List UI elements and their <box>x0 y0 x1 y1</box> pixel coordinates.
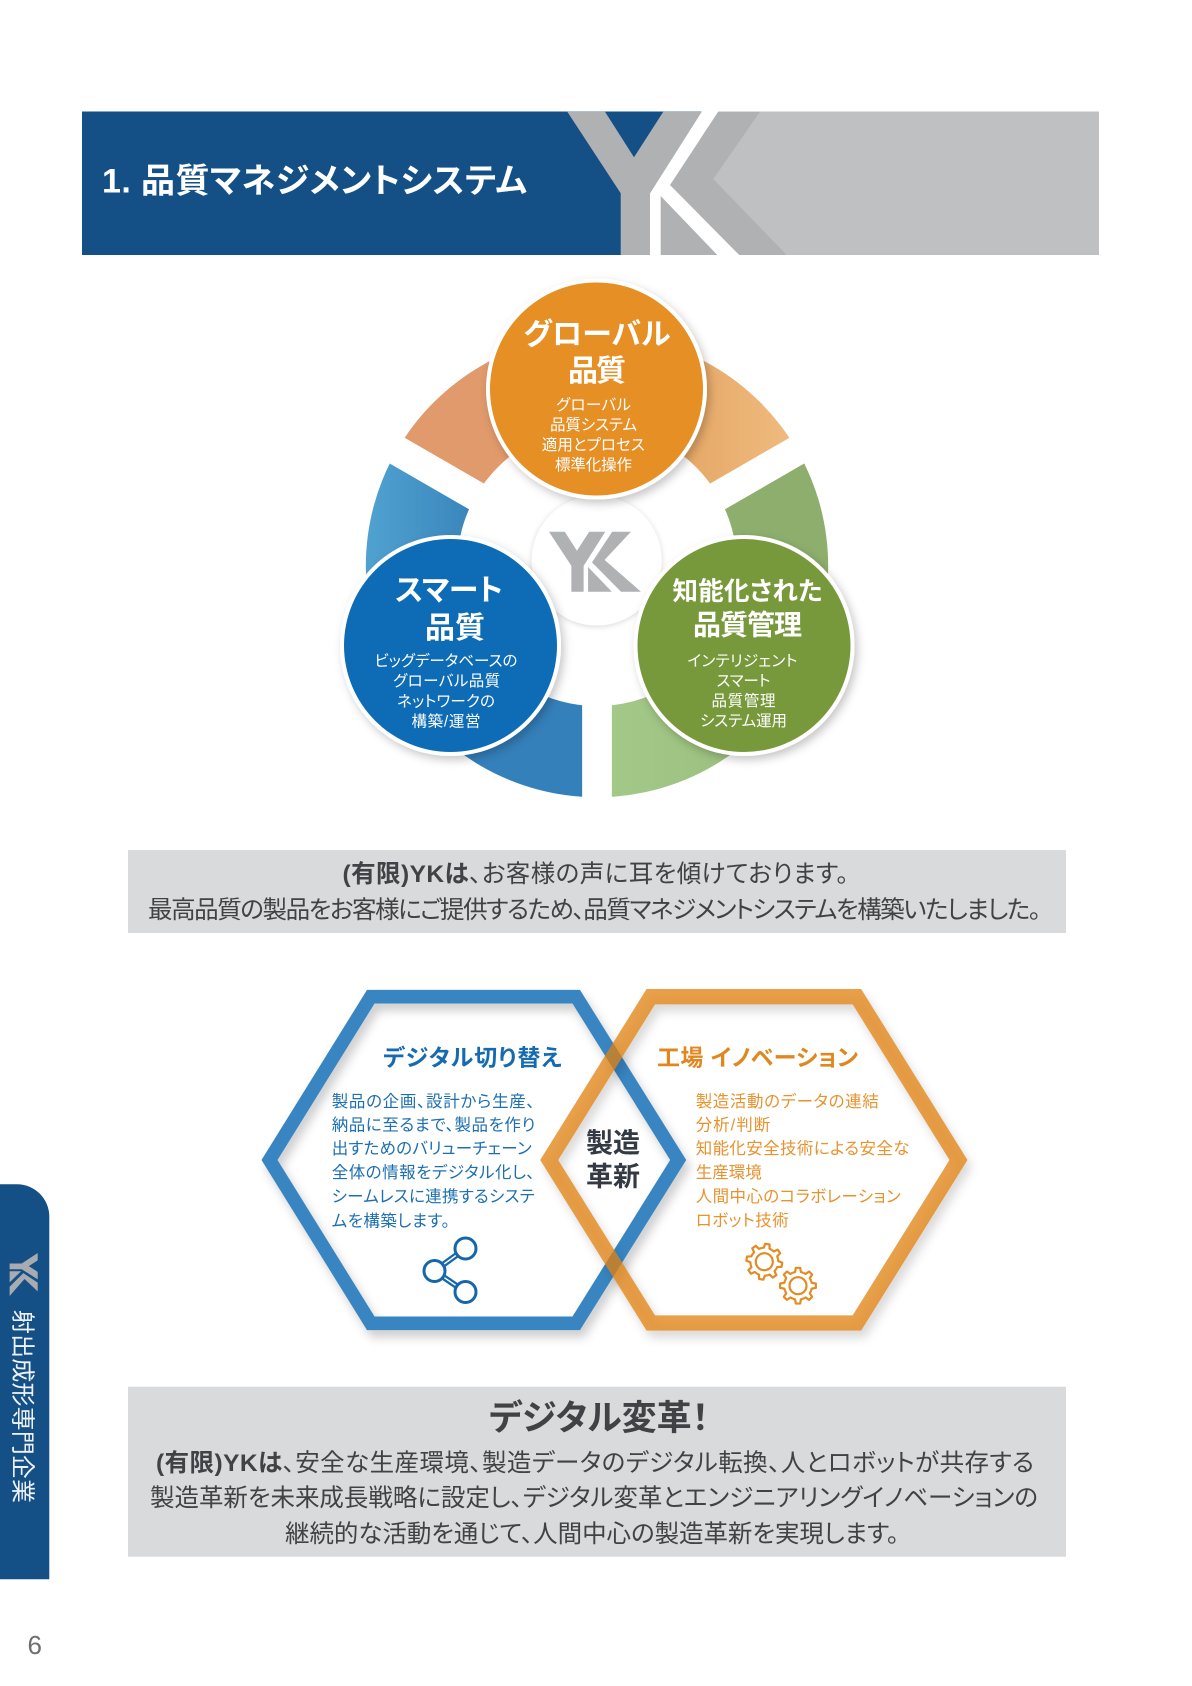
digital body text: 製品の企画、設計から生産、 <box>332 1092 535 1111</box>
icon: share network <box>424 1238 476 1302</box>
circle: global quality <box>486 278 707 500</box>
digital transformation panel <box>128 1387 1066 1557</box>
circle: smart quality: ネットワークの <box>397 692 495 710</box>
factory body text: 製造活動のデータの連結 <box>696 1091 879 1111</box>
circle: intelligent quality control: スマート <box>716 673 770 690</box>
quality cycle diagram <box>340 278 854 830</box>
banner logo gap <box>650 112 739 255</box>
banner YK logo <box>567 112 787 255</box>
factory heading: 工場 イノベーション <box>657 1045 858 1071</box>
circle: global quality: グローバル <box>524 318 671 351</box>
panel line 2: 製造革新を未来成長戦略に設定し、デジタル変革とエンジニアリングイノベーションの <box>150 1484 1038 1512</box>
digital body text: 全体の情報をデジタル化し、 <box>332 1162 535 1182</box>
factory body text: ロボット技術 <box>696 1211 789 1230</box>
circle: intelligent quality control: 品質管理 <box>712 692 776 710</box>
factory body text: 人間中心のコラボレーション <box>696 1187 901 1206</box>
ring segments <box>366 335 828 830</box>
header banner <box>82 112 1099 255</box>
centre label <box>586 1129 640 1192</box>
hexagon: digital <box>270 997 678 1323</box>
side tab <box>0 1184 49 1579</box>
page number: 6 <box>28 1630 42 1660</box>
digital heading: デジタル切り替え <box>383 1045 562 1071</box>
statement line 2: 最高品質の製品をお客様にご提供するため、品質マネジメントシステムを構築いたしました。 <box>148 896 1041 924</box>
statement panel <box>128 850 1066 933</box>
circle: global quality: 適用とプロセス <box>542 436 645 454</box>
digital body text: シームレスに連携するシステ <box>332 1187 535 1206</box>
circle: global quality: 品質 <box>568 355 626 388</box>
banner blue panel <box>82 112 702 255</box>
title: 1. 品質マネジメントシステム <box>102 162 527 200</box>
digital body text: ムを構築します。 <box>332 1211 450 1230</box>
circle: smart quality: スマート <box>395 574 503 607</box>
circle: smart quality: 品質 <box>425 612 485 645</box>
circle: smart quality: グローバル品質 <box>393 672 500 690</box>
circle: intelligent quality control: インテリジェント <box>688 653 798 670</box>
circle: intelligent quality control: システム運用 <box>700 712 787 730</box>
factory body text: 知能化安全技術による安全な <box>696 1139 909 1158</box>
circle: global quality: 標準化操作 <box>555 456 632 474</box>
side tab text: 射出成形専門企業 <box>8 1310 35 1503</box>
icon: gears <box>744 1241 816 1304</box>
factory body text: 分析/判断 <box>696 1116 770 1135</box>
circle: global quality: グローバル <box>556 396 631 414</box>
circle: smart quality: ビッグデータベースの <box>374 651 518 670</box>
panel line 1: (有限)YKは、安全な生産環境、製造データのデジタル転換、人とロボットが共存する <box>156 1449 1034 1477</box>
panel heading: デジタル変革！ <box>489 1398 709 1438</box>
circle: smart quality <box>340 535 561 756</box>
banner grey panel <box>700 112 1099 255</box>
side tab logo <box>10 1253 38 1296</box>
panel line 3: 継続的な活動を通じて、人間中心の製造革新を実現します。 <box>285 1520 899 1548</box>
factory body text <box>696 1091 909 1230</box>
statement line 1: (有限)YKは、お客様の声に耳を傾けております。 <box>342 860 848 888</box>
circle: intelligent quality control <box>634 535 854 756</box>
centre label: 革新 <box>586 1162 640 1192</box>
factory body text: 生産環境 <box>696 1163 762 1182</box>
hexagon venn diagram <box>270 997 958 1323</box>
circle: global quality: 品質システム <box>550 416 637 434</box>
digital body text: 出すためのバリューチェーン <box>332 1139 532 1158</box>
centre label: 製造 <box>586 1129 640 1159</box>
circle: intelligent quality control: 知能化された <box>672 578 822 606</box>
circle: smart quality: 構築/運営 <box>412 713 480 731</box>
circle: intelligent quality control: 品質管理 <box>693 610 802 641</box>
digital body text <box>332 1092 535 1230</box>
centre YK logo <box>549 532 641 592</box>
hexagon: factory <box>549 997 958 1323</box>
digital body text: 納品に至るまで、製品を作り <box>332 1116 535 1135</box>
centre logo disc <box>532 496 662 626</box>
